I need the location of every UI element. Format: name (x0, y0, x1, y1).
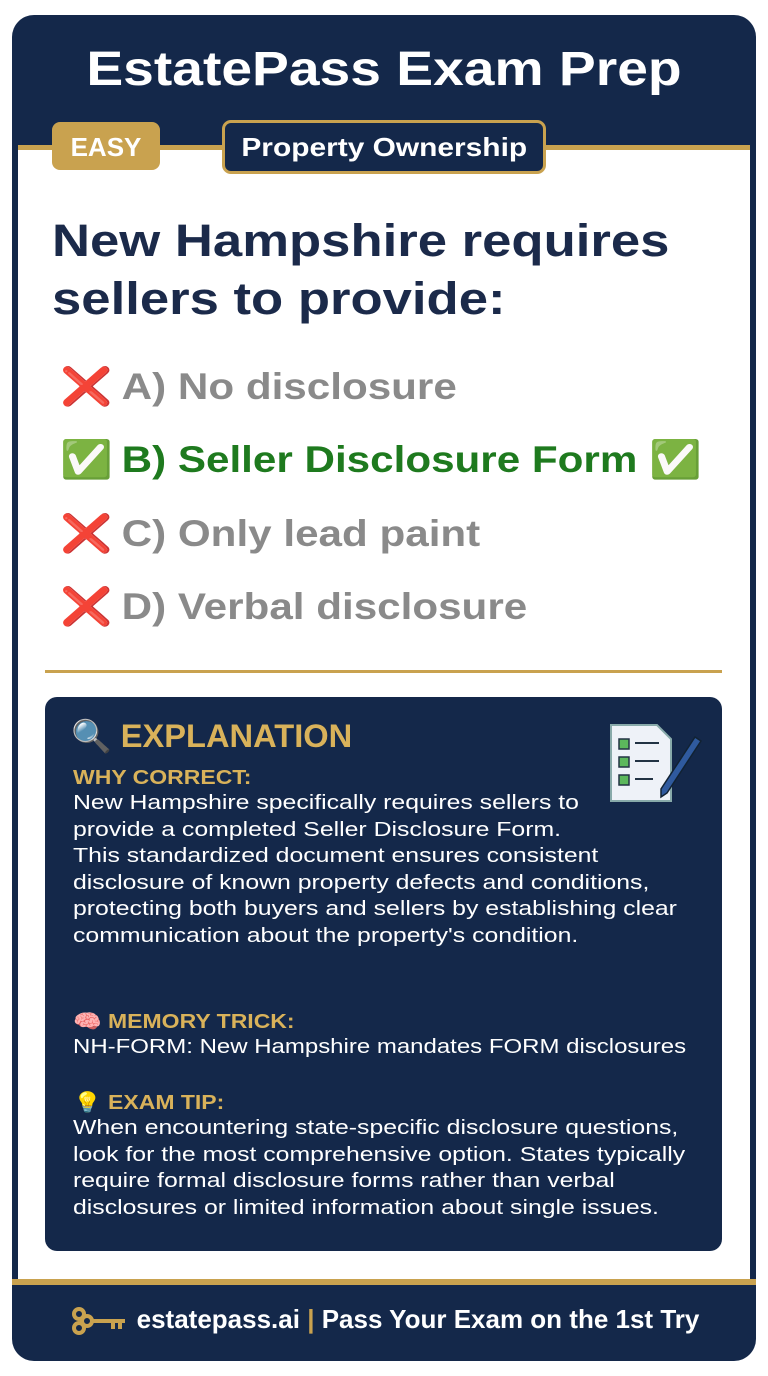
why correct (73, 767, 677, 946)
white body (18, 150, 750, 1280)
why correct: New Hampshire specifically requires sellers to (73, 791, 579, 814)
footer gold line (12, 1279, 756, 1285)
icon: key (72, 1307, 125, 1335)
why correct: WHY CORRECT: (73, 767, 251, 789)
question: sellers to provide: (52, 273, 506, 324)
memory trick: NH-FORM: New Hampshire mandates FORM disclosures (73, 1035, 686, 1058)
exam tip: require formal disclosure forms rather than verbal (73, 1169, 615, 1192)
exam tip: disclosures or limited information about single issues. (73, 1196, 659, 1218)
badge: easy: EASY (71, 132, 141, 162)
panel: explanation (45, 697, 722, 1251)
header gold line (18, 145, 750, 150)
divider (45, 670, 722, 673)
why correct: protecting both buyers and sellers by establishing clear (73, 897, 677, 920)
question: New Hampshire requires (52, 215, 669, 266)
badge: category (222, 120, 546, 174)
option D: ❌D) Verbal disclosure (60, 586, 527, 627)
exam tip: 💡 EXAM TIP: (73, 1092, 224, 1114)
memory trick: 🧠 MEMORY TRICK: (73, 1011, 295, 1033)
heading: explanation: 🔍 EXPLANATION (71, 718, 352, 754)
why correct: disclosure of known property defects and conditions, (73, 870, 649, 894)
badge: easy (52, 122, 160, 170)
icon: checklist (610, 724, 702, 802)
question (52, 215, 669, 324)
exam tip (73, 1091, 686, 1218)
exam tip: look for the most comprehensive option. States typically (73, 1142, 685, 1166)
option A: ❌A) No disclosure (60, 366, 457, 407)
title: EstatePass Exam Prep (86, 43, 682, 96)
badge: category: Property Ownership (241, 132, 527, 162)
exam tip: When encountering state-specific disclosure questions, (73, 1116, 678, 1139)
why correct: provide a completed Seller Disclosure Form. (73, 818, 561, 840)
option C: ❌C) Only lead paint (60, 513, 480, 554)
option B correct: ✅B) Seller Disclosure Form ✅ (60, 439, 702, 480)
why correct: communication about the property's condition. (73, 924, 578, 946)
memory trick (73, 1011, 686, 1058)
footer: estatepass.ai | Pass Your Exam on the 1st Try (137, 1304, 699, 1334)
why correct: This standardized document ensures consistent (73, 844, 598, 867)
